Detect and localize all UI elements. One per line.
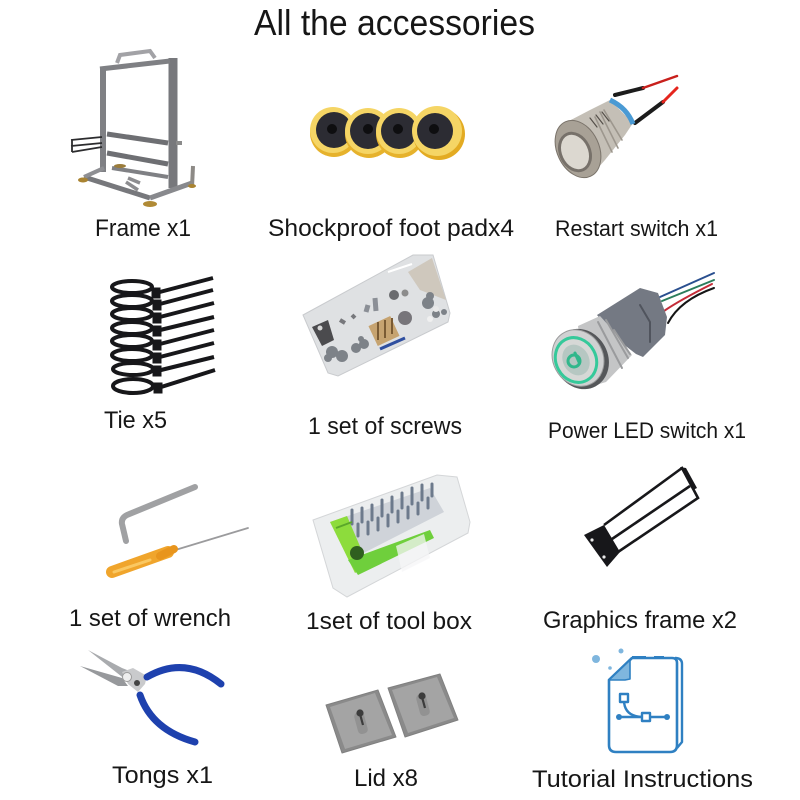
label: tutorial instructions: Tutorial Instructions — [532, 766, 753, 793]
icon: pliers — [80, 650, 221, 742]
panel: graphics frame — [543, 467, 737, 634]
title: All the accessories — [254, 2, 535, 43]
label: tool box: 1set of tool box — [306, 608, 472, 635]
panel: frame — [71, 51, 196, 242]
panel: tie — [104, 278, 215, 434]
icon: box of screws — [303, 255, 450, 376]
icon: two lids — [326, 674, 458, 753]
icon: cable ties — [112, 278, 215, 393]
panel: restart switch — [546, 76, 718, 241]
label: tongs: Tongs x1 — [112, 762, 213, 789]
icon: power LED switch — [542, 273, 714, 399]
panel: tutorial instructions — [532, 648, 753, 793]
label: lid: Lid x8 — [354, 765, 418, 792]
icon: document with vector path — [592, 648, 682, 752]
label: frame: Frame x1 — [95, 215, 191, 242]
panel: shockproof foot pads — [268, 106, 514, 242]
icon: restart switch — [546, 76, 677, 185]
label: wrench: 1 set of wrench — [69, 605, 231, 632]
panel: wrench — [69, 487, 248, 632]
icon: graphics bracket — [584, 467, 698, 567]
panel: tongs — [80, 650, 221, 789]
panel: tool box — [306, 475, 472, 635]
label: tie: Tie x5 — [104, 407, 167, 434]
icon: metal frame — [71, 51, 196, 207]
label: graphics frame: Graphics frame x2 — [543, 607, 737, 634]
panel: power LED switch — [542, 273, 746, 443]
icon: four foot pads — [310, 106, 465, 160]
panel: screws — [303, 255, 462, 440]
label: screws: 1 set of screws — [308, 413, 462, 440]
panel: lid — [326, 674, 458, 792]
label: restart switch: Restart switch x1 — [555, 216, 718, 241]
label: power LED switch: Power LED switch x1 — [548, 418, 746, 443]
icon: hex key and screwdriver — [112, 487, 248, 572]
icon: tool box — [313, 475, 470, 597]
label: foot pads: Shockproof foot padx4 — [268, 215, 514, 242]
